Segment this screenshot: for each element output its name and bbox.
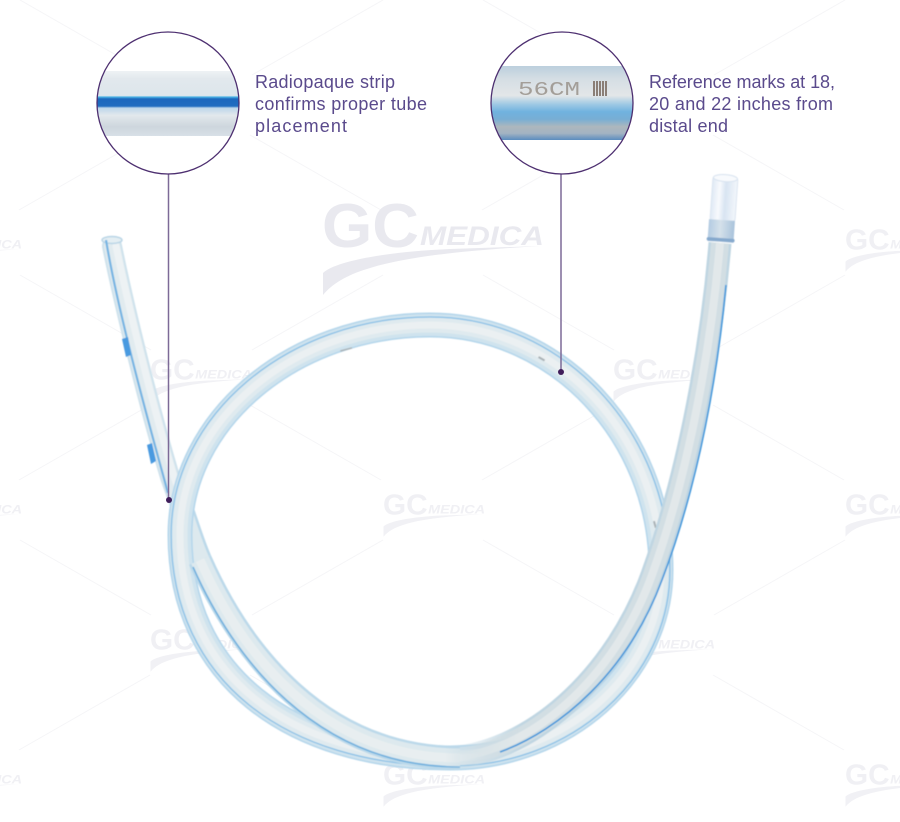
watermark: small logos: MEDICA: [195, 368, 252, 382]
watermark: small logos: GC: [613, 625, 658, 657]
tip strand under ring: [180, 505, 200, 560]
tip strand lower portion: [193, 560, 460, 767]
watermark: large GC Medica logo: MEDICA: [420, 221, 544, 251]
watermark: large GC Medica logo: GC: [322, 192, 419, 261]
leader line and dot: [558, 172, 564, 375]
magnified circle: strip: [90, 32, 250, 174]
proximal strand to connector: [440, 243, 726, 758]
caption: distal end: [649, 116, 728, 136]
watermark: small logos: [0, 225, 900, 807]
watermark: small logos: MEDICA: [428, 503, 485, 517]
leader line and dot: [166, 172, 172, 503]
caption: 20 and 22 inches from: [649, 94, 833, 114]
magnified circle: printed mark: 56CM: [518, 79, 580, 101]
printed depth marks: [340, 347, 657, 528]
caption: placement: [255, 116, 347, 136]
tube loop: [171, 317, 670, 766]
caption: confirms proper tube: [255, 94, 427, 114]
watermark: small logos: GC: [150, 355, 195, 387]
watermark: small logos: GC: [845, 760, 890, 792]
caption: Radiopaque strip: [255, 72, 395, 92]
watermark: small logos: GC: [845, 225, 890, 257]
distal tip segment: [102, 236, 184, 505]
watermark: small logos: GC: [383, 490, 428, 522]
caption: Reference marks at 18,: [649, 72, 835, 92]
watermark: small logos: GC: [150, 625, 195, 657]
watermark: small logos: MEDICA: [195, 638, 252, 652]
watermark: small logos: GC: [383, 760, 428, 792]
magnified circle: printed mark: [485, 32, 640, 174]
watermark: small logos: MEDICA: [428, 773, 485, 787]
watermark: small logos: GC: [845, 490, 890, 522]
callout: reference marks: [485, 32, 840, 375]
watermark: small logos: MEDICA: [658, 638, 715, 652]
side eye holes: [122, 337, 156, 464]
callout: radiopaque strip: [90, 32, 432, 503]
watermark: small logos: MEDICA: [658, 368, 715, 382]
tube illustration: [102, 174, 739, 767]
watermark: large GC Medica logo: [322, 192, 544, 295]
watermark: small logos: GC: [613, 355, 658, 387]
connector: clear cap and sleeve: [706, 174, 739, 243]
